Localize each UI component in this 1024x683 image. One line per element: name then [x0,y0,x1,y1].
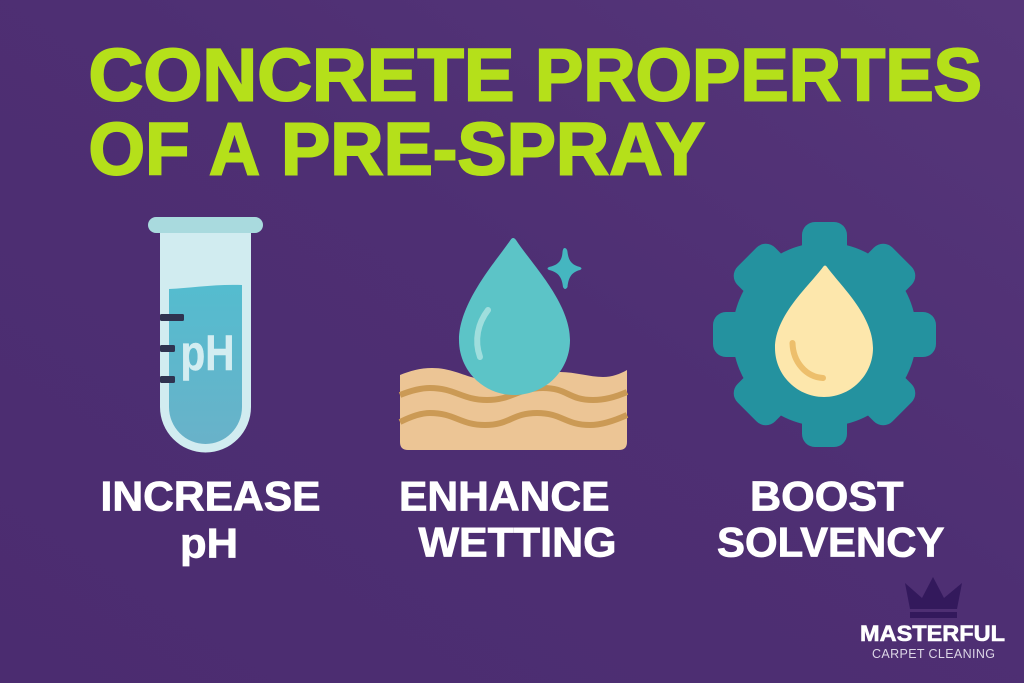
label: enhance wetting: ENHANCE [399,472,610,519]
label: increase pH [100,472,320,566]
label: enhance wetting: WETTING [418,518,616,565]
icon: water drop on carpet [400,238,627,450]
label: increase pH: pH [180,519,238,566]
label: enhance wetting [399,472,616,565]
label: increase pH: INCREASE [100,472,320,519]
title: CONCRETE [88,34,514,117]
title: A [209,108,260,191]
icon: test tube [148,217,263,452]
logo: Masterful Carpet Cleaning: MASTERFUL [860,621,1005,646]
title: OF [88,108,190,191]
icon: test tube: pH [180,325,234,381]
label: boost solvency: SOLVENCY [717,518,945,565]
label: boost solvency [717,472,945,565]
logo: Masterful Carpet Cleaning: CARPET CLEANING [872,647,995,661]
title [88,34,982,191]
label: boost solvency: BOOST [750,472,904,519]
title: PRE-SPRAY [281,108,705,191]
logo: Masterful Carpet Cleaning [860,577,1005,661]
title: PROPERTES [535,34,982,117]
icon: gear with drop [713,222,936,447]
